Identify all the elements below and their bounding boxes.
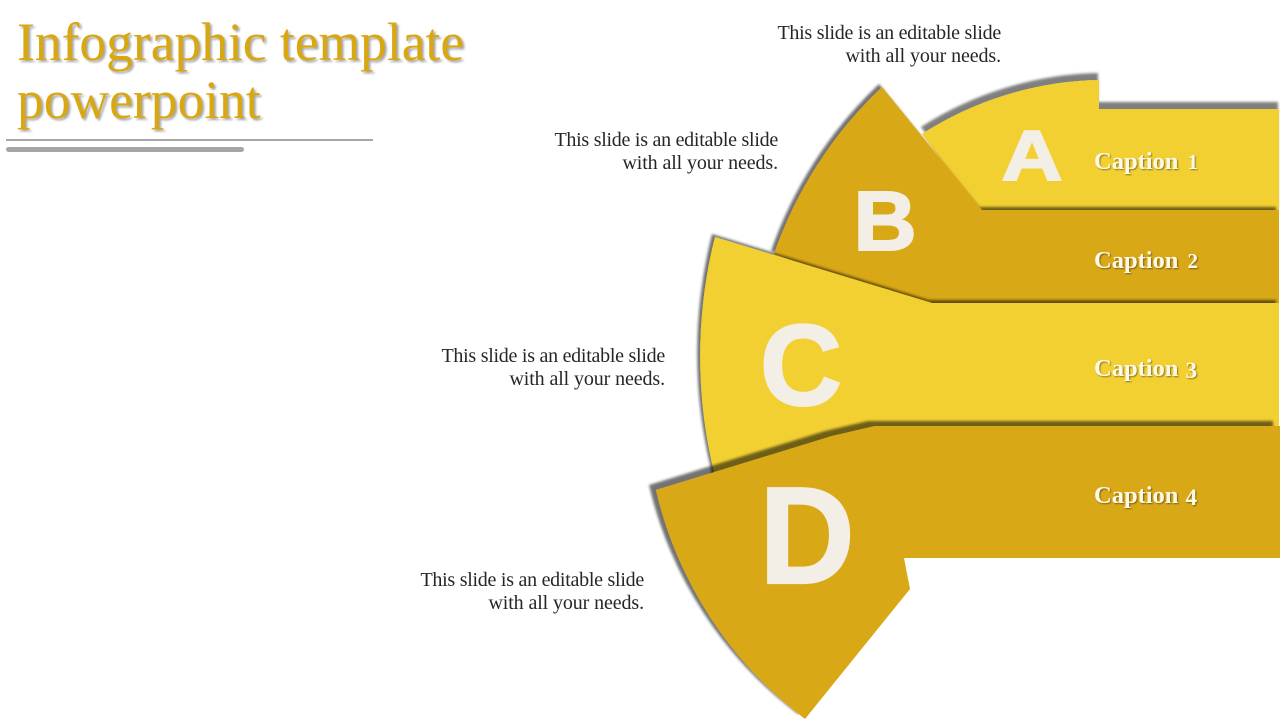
letter C: C xyxy=(760,302,842,430)
segment C xyxy=(700,237,1279,480)
text block D: This slide is an editable slide xyxy=(420,569,644,591)
caption 4: Caption xyxy=(1094,482,1178,509)
caption 4: 4 xyxy=(1186,485,1198,510)
caption 1: Caption 1 xyxy=(1094,148,1198,175)
text block B xyxy=(554,129,778,174)
letter A: A xyxy=(1002,117,1062,195)
text block C xyxy=(441,345,665,390)
title underline xyxy=(6,139,373,141)
segment B xyxy=(774,87,1279,310)
caption 2: Caption 2 xyxy=(1094,247,1198,274)
text block A: This slide is an editable slide xyxy=(777,22,1001,44)
letter B: B xyxy=(853,174,917,269)
text block C: This slide is an editable slide xyxy=(441,345,665,367)
text block B: with all your needs. xyxy=(622,152,778,174)
text block B: This slide is an editable slide xyxy=(554,129,778,151)
title accent bar xyxy=(6,147,244,152)
letter D: D xyxy=(759,458,855,613)
title xyxy=(17,12,466,133)
text block D: with all your needs. xyxy=(488,592,644,614)
text block D xyxy=(420,569,644,614)
text block A xyxy=(777,22,1001,67)
title: powerpoint xyxy=(17,70,261,130)
segment A xyxy=(922,80,1279,215)
caption 3: Caption xyxy=(1094,355,1178,382)
segment D xyxy=(656,426,1280,719)
text block C: with all your needs. xyxy=(509,368,665,390)
text block A: with all your needs. xyxy=(845,45,1001,67)
title: Infographic template xyxy=(17,12,464,72)
caption 3: 3 xyxy=(1186,358,1197,383)
